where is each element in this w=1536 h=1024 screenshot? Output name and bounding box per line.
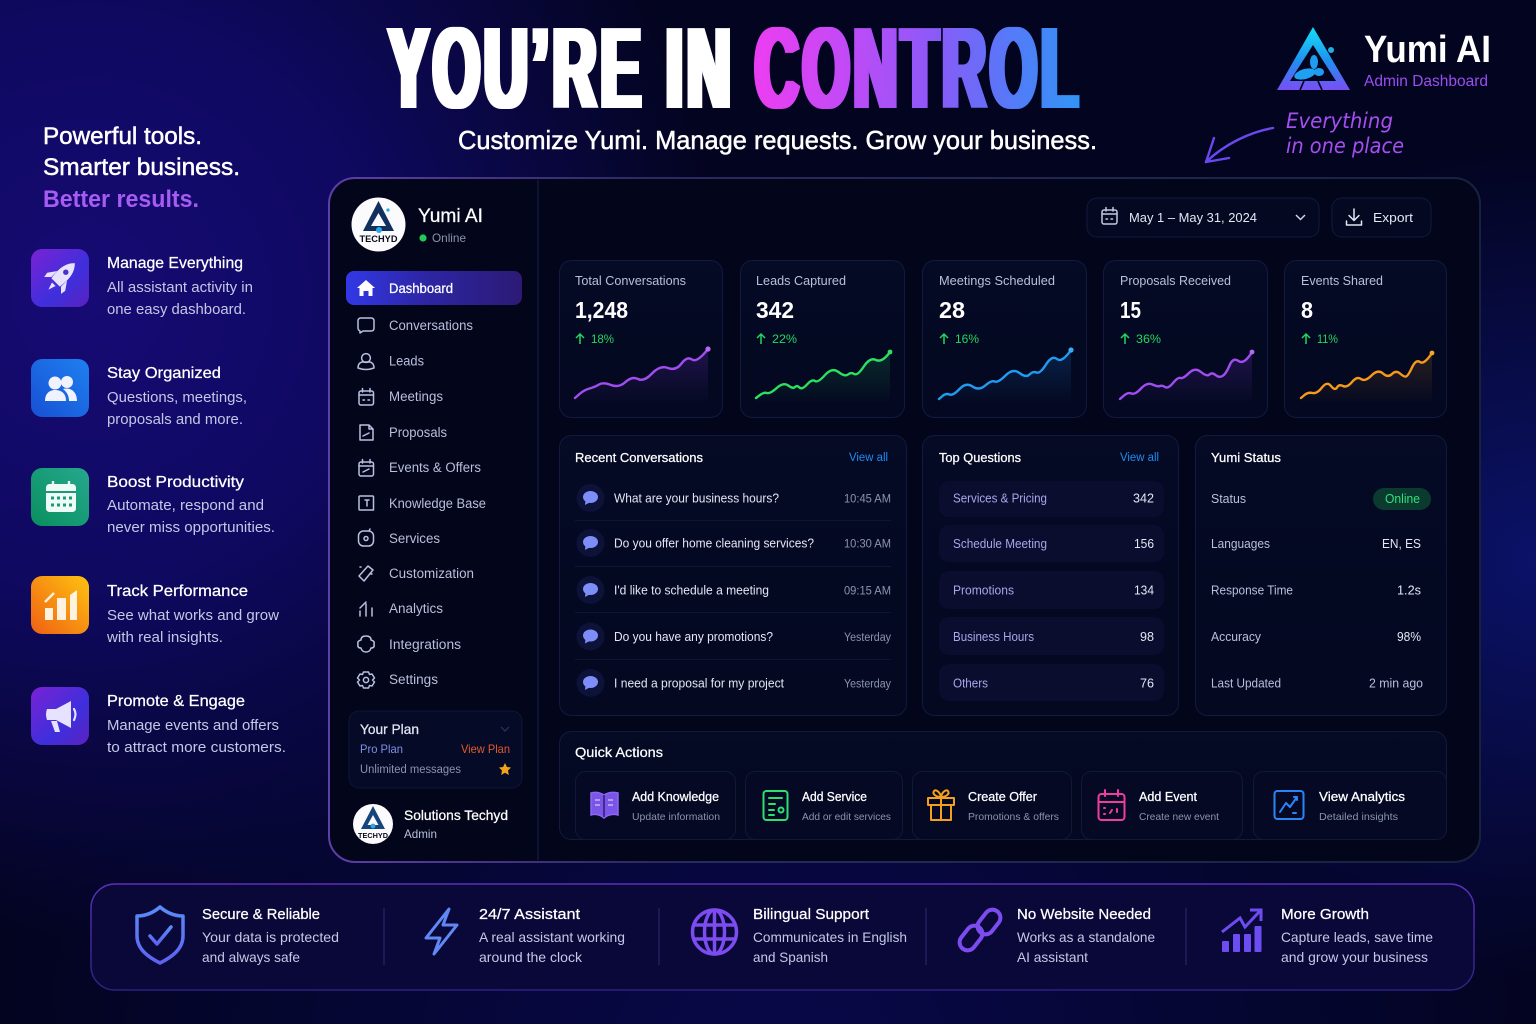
feature: Track Performance (31, 576, 279, 646)
icon: triangle logo mark (1277, 27, 1350, 90)
status row: Accuracy (1211, 630, 1421, 644)
nav: Settings: Settings (389, 672, 438, 687)
benefit: No Website Needed: Works as a standalone (1017, 929, 1155, 945)
question row: Others: 76 (1140, 676, 1154, 690)
nav: Settings (358, 672, 438, 688)
feature: Boost Productivity (31, 468, 275, 536)
feature: Stay Organized: proposals and more. (107, 411, 243, 428)
benefit: Bilingual Support: Bilingual Support (753, 907, 869, 923)
nav: Integrations (358, 636, 461, 652)
status row: Response Time (1211, 584, 1421, 598)
date range picker (1087, 198, 1319, 237)
export button: Export (1373, 210, 1413, 225)
trend: 16%: 16% (955, 332, 979, 346)
icon: gift (928, 790, 954, 820)
panel: Top Questions (922, 436, 1178, 716)
sparkline: violet (1120, 350, 1254, 405)
left heading (43, 123, 240, 213)
logo: Yumi AI Admin Dashboard: Admin Dashboard (1364, 73, 1488, 90)
question row: Business Hours: 98 (1140, 630, 1154, 644)
nav: Analytics: Analytics (389, 601, 443, 616)
icon: book (591, 792, 618, 818)
status row: Status (1211, 488, 1431, 510)
sparkline: orange (1301, 351, 1434, 405)
arrow: callout to dashboard (1206, 128, 1273, 162)
card: Your Plan: Pro Plan (360, 742, 403, 756)
feature: Promote & Engage: Manage events and offers (107, 717, 279, 734)
action: Create Offer: Create Offer (968, 790, 1037, 804)
conversation row 4 (576, 622, 891, 650)
status row: Last Updated: Last Updated (1211, 676, 1281, 690)
nav: Services (358, 529, 440, 546)
trend: 11%: 11% (1317, 332, 1338, 346)
status row: Accuracy: 98% (1397, 630, 1421, 644)
question row: Business Hours: Business Hours (953, 630, 1034, 644)
conversation row 4: Yesterday (844, 632, 891, 644)
conversation row 5 (576, 669, 891, 697)
feature: Track Performance: Track Performance (107, 583, 248, 600)
nav: Conversations: Conversations (389, 318, 473, 333)
nav: Events & Offers: Events & Offers (389, 460, 481, 475)
feature: Promote & Engage: to attract more customers. (107, 739, 286, 756)
trend: 22% (757, 332, 797, 346)
status row: Response Time: Response Time (1211, 584, 1293, 598)
nav: Proposals: Proposals (389, 425, 447, 440)
benefit: 24/7 Assistant: 24/7 Assistant (479, 907, 580, 923)
benefit: 24/7 Assistant: A real assistant working (479, 929, 625, 945)
sparkline: blue (939, 347, 1074, 405)
question row: Promotions: Promotions (953, 584, 1014, 598)
panel: Recent Conversations: Recent Conversations (575, 450, 703, 465)
question row: Business Hours (939, 617, 1164, 655)
conversation row 1: What are your business hours? (614, 492, 779, 506)
status row: Last Updated (1211, 676, 1423, 690)
feature: Boost Productivity: Boost Productivity (107, 474, 244, 491)
feature: Manage Everything: Manage Everything (107, 255, 243, 272)
feature: Boost Productivity: Automate, respond and (107, 497, 264, 514)
stat card: Meetings Scheduled (922, 260, 1086, 418)
handwritten callout: Everything in one place: in one place (1286, 134, 1404, 158)
stat card: Proposals Received: 15 (1120, 297, 1141, 323)
question row: Services & Pricing: Services & Pricing (953, 492, 1047, 506)
nav: Leads (358, 354, 424, 370)
feature list (31, 249, 286, 756)
sparkline: purple (575, 346, 711, 405)
nav: Customization: Customization (389, 566, 474, 581)
feature: Stay Organized: Questions, meetings, (107, 389, 247, 406)
bottom benefits bar (91, 884, 1474, 990)
avatar: Techyd small (353, 804, 393, 844)
question row: Services & Pricing (939, 481, 1164, 517)
panel: Quick Actions (560, 732, 1446, 840)
sidebar user: Solutions Techyd: Solutions Techyd (404, 807, 508, 823)
left heading: Better results. (43, 186, 199, 213)
feature: Promote & Engage: Promote & Engage (107, 693, 245, 710)
panel: Quick Actions: Quick Actions (575, 744, 663, 760)
icon: rocket (39, 254, 84, 299)
benefit: 24/7 Assistant (426, 907, 625, 965)
benefit: Secure & Reliable: and always safe (202, 949, 300, 965)
conversation row 3: I'd like to schedule a meeting (614, 584, 769, 598)
conversation row 1 (576, 484, 891, 512)
left heading: Powerful tools. (43, 123, 202, 150)
benefit: No Website Needed: No Website Needed (1017, 907, 1151, 923)
feature: Stay Organized: Stay Organized (107, 365, 221, 382)
stat card: Meetings Scheduled: Meetings Scheduled (939, 274, 1055, 288)
icon: lightning bolt (426, 909, 457, 954)
feature: Track Performance: See what works and grow (107, 607, 279, 624)
logo: Yumi AI Admin Dashboard (1277, 27, 1491, 90)
sidebar brand: Online (432, 231, 466, 245)
left heading: Smarter business. (43, 154, 240, 181)
sidebar brand: Yumi AI (418, 206, 483, 227)
sidebar brand (352, 198, 483, 252)
nav: Leads: Leads (389, 354, 424, 368)
feature: Manage Everything: All assistant activity in (107, 279, 253, 296)
conversation row 3: 09:15 AM (844, 586, 891, 598)
export button (1332, 198, 1431, 237)
benefit: More Growth: and grow your business (1281, 949, 1428, 965)
nav: Dashboard (active) (346, 271, 522, 305)
trend: 22%: 22% (772, 332, 797, 346)
stat card: Total Conversations (560, 260, 722, 418)
avatar: Techyd small: TECHYD (358, 831, 389, 840)
nav: Knowledge Base: Knowledge Base (389, 496, 486, 511)
action: Create Offer (912, 772, 1072, 840)
nav: Meetings: Meetings (389, 389, 443, 404)
conversation row 5: I need a proposal for my project (614, 676, 785, 690)
nav: Meetings (359, 388, 443, 405)
trend: 16% (940, 332, 979, 346)
icon: globe (692, 910, 736, 954)
trend: 36%: 36% (1136, 332, 1161, 346)
action: Add Event (1082, 772, 1242, 840)
title: CONTROL (755, 3, 1082, 133)
action: Add Service: Add or edit services (802, 811, 891, 823)
stat card: Events Shared: Events Shared (1301, 274, 1383, 288)
benefit: More Growth: More Growth (1281, 907, 1369, 923)
conversation row 3 (576, 576, 891, 604)
title: YOU’RE IN (388, 3, 735, 133)
avatar: Techyd logo: TECHYD (360, 234, 398, 245)
action: Add Knowledge (576, 772, 736, 840)
status row: Response Time: 1.2s (1397, 584, 1421, 598)
panel: Recent Conversations (560, 436, 906, 716)
benefit: Bilingual Support (692, 907, 907, 965)
handwritten callout: Everything in one place: Everything (1286, 109, 1393, 133)
stat card: Proposals Received (1104, 260, 1268, 418)
conversation row 2: 10:30 AM (844, 538, 891, 550)
action: Create Offer: Promotions & offers (968, 811, 1059, 823)
question row: Schedule Meeting: Schedule Meeting (953, 537, 1047, 551)
trend: 36% (1121, 332, 1161, 346)
status row: Languages (1211, 537, 1421, 551)
panel: Top Questions: Top Questions (939, 450, 1021, 465)
trend: 18%: 18% (591, 332, 614, 346)
question row: Promotions: 134 (1134, 584, 1154, 598)
trend: 11% (1302, 332, 1338, 346)
action: View Analytics: Detailed insights (1319, 811, 1398, 823)
sidebar (346, 198, 522, 844)
feature: Boost Productivity: never miss opportunities. (107, 519, 275, 536)
action: View Analytics (1254, 772, 1446, 840)
question row: Services & Pricing: 342 (1133, 492, 1154, 506)
icon: growth chart (1222, 910, 1262, 952)
icon: service list (764, 791, 788, 820)
benefit: Bilingual Support: Communicates in English (753, 929, 907, 945)
question row: Promotions (939, 571, 1164, 609)
icon: pink calendar (1098, 790, 1124, 820)
sidebar user: Solutions Techyd: Admin (404, 827, 437, 841)
stat card: Leads Captured (740, 260, 904, 418)
icon: megaphone (46, 701, 76, 732)
status row: Status: Online (1385, 492, 1420, 506)
stat card: Proposals Received: Proposals Received (1120, 274, 1231, 288)
feature: Manage Everything (31, 249, 253, 318)
icon: people (45, 376, 77, 401)
title (388, 3, 1082, 133)
feature: Stay Organized (31, 359, 247, 428)
status row: Status: Status (1211, 492, 1246, 506)
status row: Accuracy: Accuracy (1211, 630, 1262, 644)
feature: Manage Everything: one easy dashboard. (107, 301, 246, 318)
icon: analytics screen (1274, 791, 1304, 819)
nav: Integrations: Integrations (389, 637, 461, 652)
icon: shield (137, 907, 183, 963)
stat card: Leads Captured: Leads Captured (756, 274, 846, 288)
conversation row 2: Do you offer home cleaning services? (614, 536, 814, 550)
feature: Track Performance: with real insights. (106, 629, 223, 646)
benefit: More Growth: Capture leads, save time (1281, 929, 1433, 945)
action: Add Knowledge: Update information (632, 811, 720, 823)
date range picker: May 1 – May 31, 2024 (1129, 210, 1257, 225)
action: Add Event: Add Event (1139, 790, 1198, 804)
status row: Last Updated: 2 min ago (1369, 676, 1423, 690)
conversation row 2 (576, 529, 891, 557)
conversation row 1: 10:45 AM (844, 494, 891, 506)
conversation row 4: Do you have any promotions? (614, 630, 773, 644)
nav: Dashboard (active): Dashboard (389, 281, 453, 296)
action: Add Event: Create new event (1139, 811, 1219, 823)
panel: Recent Conversations: View all (849, 452, 888, 464)
card: Your Plan: Your Plan (360, 721, 419, 737)
action: View Analytics: View Analytics (1319, 790, 1405, 804)
subtitle: Customize Yumi. Manage requests. Grow your business. (458, 125, 1097, 155)
question row: Others (939, 664, 1164, 701)
question row: Others: Others (953, 676, 988, 690)
nav: Services: Services (389, 531, 440, 546)
icon: star (499, 763, 511, 775)
nav: Proposals (360, 425, 447, 440)
stat card: Events Shared: 8 (1301, 297, 1313, 323)
status row: Languages: Languages (1211, 537, 1270, 551)
benefit: No Website Needed (956, 906, 1155, 965)
nav: Analytics (360, 601, 443, 616)
benefit: Secure & Reliable: Secure & Reliable (202, 907, 320, 923)
dashboard panel (329, 178, 1480, 862)
handwritten callout: Everything in one place (1286, 109, 1404, 158)
icon: calendar (46, 481, 76, 512)
stat card: Meetings Scheduled: 28 (939, 297, 965, 323)
sparkline: green (756, 350, 892, 405)
stat card: Leads Captured: 342 (756, 297, 794, 323)
conversation row 5: Yesterday (844, 678, 891, 690)
action: Add Service: Add Service (802, 790, 867, 804)
panel: Yumi Status: Yumi Status (1211, 450, 1281, 465)
nav: Events & Offers (359, 460, 481, 476)
action: Add Knowledge: Add Knowledge (632, 790, 719, 804)
question row: Schedule Meeting: 156 (1134, 537, 1154, 551)
panel: Yumi Status (1196, 436, 1446, 716)
sidebar user: Solutions Techyd (353, 804, 508, 844)
status row: Languages: EN, ES (1382, 537, 1421, 551)
icon: chain link (956, 906, 1004, 954)
benefit: Secure & Reliable (137, 907, 339, 965)
benefit: Secure & Reliable: Your data is protected (202, 929, 339, 945)
icon: bar chart (45, 590, 77, 620)
logo: Yumi AI Admin Dashboard: Yumi AI (1364, 29, 1491, 71)
benefit: 24/7 Assistant: around the clock (479, 949, 583, 965)
trend: 18% (576, 332, 614, 346)
panel: Top Questions: View all (1120, 452, 1159, 464)
benefit: No Website Needed: AI assistant (1017, 949, 1088, 965)
feature: Promote & Engage (31, 687, 286, 756)
card: Your Plan (349, 711, 522, 788)
question row: Schedule Meeting (939, 525, 1164, 562)
card: Your Plan: View Plan (461, 742, 510, 756)
stat card: Total Conversations: 1,248 (575, 297, 628, 323)
stat card: Events Shared (1284, 260, 1446, 418)
benefit: Bilingual Support: and Spanish (753, 949, 828, 965)
icon: home (357, 280, 375, 296)
card: Your Plan: Unlimited messages (360, 764, 461, 776)
action: Add Service (746, 772, 902, 840)
stat card: Total Conversations: Total Conversations (575, 274, 686, 288)
benefit: More Growth (1222, 907, 1433, 965)
